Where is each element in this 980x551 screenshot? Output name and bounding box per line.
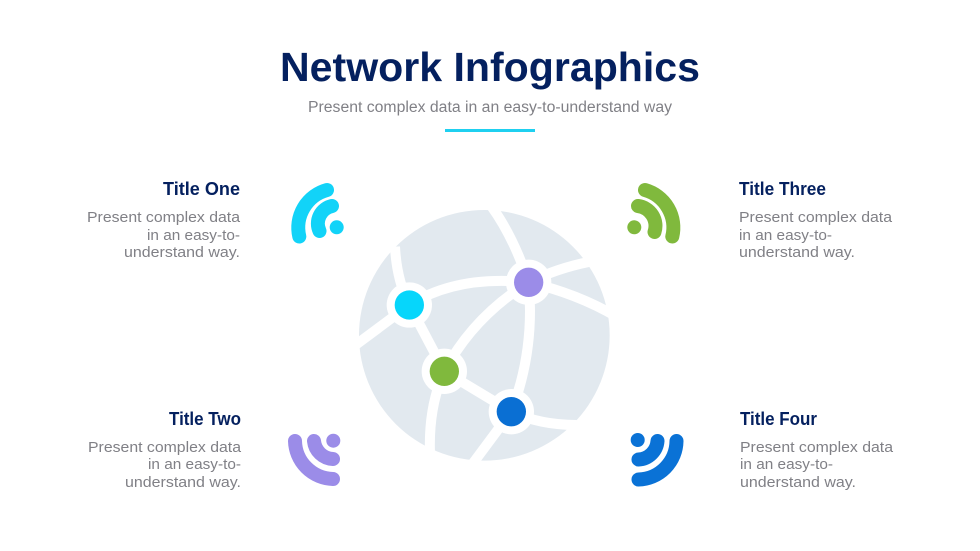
text block: title three bbox=[739, 179, 893, 261]
globe disc bbox=[359, 210, 610, 461]
text block: title one: Present complex data bbox=[87, 209, 241, 226]
node: cyan bbox=[387, 282, 432, 328]
text block: title three: Present complex data bbox=[739, 209, 893, 226]
text block: title four: Title Four bbox=[740, 409, 817, 429]
subtitle: Present complex data in an easy-to-understand way bbox=[308, 99, 672, 116]
node: purple bbox=[506, 260, 551, 305]
text block: title one: understand way. bbox=[124, 244, 240, 261]
text block: title three: in an easy-to- bbox=[739, 227, 832, 244]
text block: title four: understand way. bbox=[740, 474, 856, 491]
network lines bbox=[353, 207, 617, 465]
text block: title two: Present complex data bbox=[88, 439, 242, 456]
text block: title two: understand way. bbox=[125, 474, 241, 491]
accent bar bbox=[445, 129, 535, 132]
text block: title one bbox=[87, 179, 241, 261]
text block: title one: in an easy-to- bbox=[147, 227, 240, 244]
text block: title one: Title One bbox=[163, 179, 240, 199]
globe network bbox=[353, 207, 617, 465]
node: blue bbox=[489, 389, 534, 434]
icon: green signal bbox=[627, 190, 673, 236]
text block: title four: Present complex data bbox=[740, 439, 894, 456]
text block: title four: in an easy-to- bbox=[740, 456, 833, 473]
icon: cyan signal bbox=[298, 190, 344, 236]
node: green bbox=[422, 349, 467, 394]
icon: purple signal bbox=[295, 434, 340, 479]
text block: title four bbox=[740, 409, 894, 491]
text block: title three: understand way. bbox=[739, 244, 855, 261]
text block: title three: Title Three bbox=[739, 179, 826, 199]
title: Network Infographics bbox=[280, 44, 700, 90]
icon: blue signal bbox=[631, 433, 676, 480]
text block: title two: in an easy-to- bbox=[148, 456, 241, 473]
text block: title two bbox=[88, 409, 242, 491]
text block: title two: Title Two bbox=[169, 409, 241, 429]
